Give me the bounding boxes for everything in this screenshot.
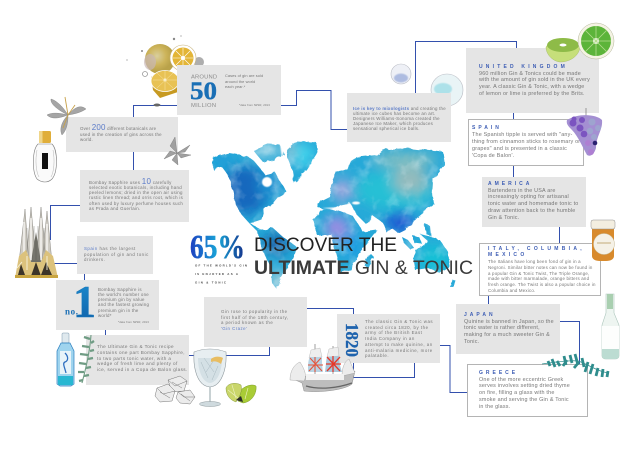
text: number one: Bombay Sapphire is — [98, 286, 142, 292]
panel: 10 botanicals: Bombay Sapphire uses 10 carefully — [89, 177, 172, 186]
body: tonic water and homemade tonic to — [488, 201, 579, 207]
body: grapes" and is presented in a classic — [472, 146, 567, 152]
icon: small flower — [164, 137, 191, 165]
panel: 10 botanicals: rustic linen thread; and orris root, which is — [89, 195, 183, 200]
panel: ice — [347, 93, 451, 142]
icon: perfume bottle — [33, 131, 56, 182]
heading: UNITED KINGDOM — [479, 64, 568, 70]
body: The Spanish tipple is served with "any- — [472, 132, 573, 138]
heading: GREECE — [479, 370, 518, 376]
panel: ice: Designers Williams-Sonoma created the — [353, 116, 440, 121]
body: year. A classic Gin & Tonic, with a wedge — [479, 84, 584, 90]
stat: 65 percent: IS ENJOYED AS A — [195, 272, 239, 276]
panel: 1820: The classic Gin & Tonic was — [365, 319, 433, 324]
title: DISCOVER THE — [254, 234, 397, 256]
map seas — [262, 144, 360, 212]
text: number one: premium gin in the — [98, 308, 139, 313]
icon: gin bottle — [57, 333, 74, 386]
panel: 1820: anti-malaria medicine, more — [365, 348, 433, 353]
body: The Italians have long been fond of gin in a — [488, 259, 581, 264]
icon: cathedral — [15, 207, 58, 278]
panel: America — [482, 177, 586, 227]
icon: iris flower — [47, 97, 86, 135]
panel: United Kingdom — [466, 48, 599, 113]
panel: 10 botanicals — [80, 170, 189, 222]
panel: 10 botanicals: as Prada and Guerlain. — [89, 206, 141, 211]
panel: gin craze: 'Gin Craze' — [221, 326, 247, 331]
panel: ice: sensational spherical ice balls. — [353, 126, 420, 131]
panel: 1820: palatable. — [365, 353, 389, 358]
body — [472, 132, 580, 159]
body: increasingly opting for artisanal — [488, 194, 569, 200]
icon: citrus fruits — [126, 35, 204, 106]
panel: ultimate recipe: to two parts tonic water, with a — [97, 356, 171, 361]
stat: around 50 million: 50 — [190, 78, 217, 105]
panel: ice: Ice is key to mixologists and creating the — [353, 106, 446, 110]
body: with the amount of gin sold in the UK every — [479, 77, 590, 83]
body: Tonic. — [464, 339, 479, 345]
title — [254, 234, 473, 279]
stat: 65 percent — [190, 229, 247, 284]
body: fresh orange. The Twist is also a popular choice in — [488, 282, 596, 287]
stat: around 50 million: AROUND — [191, 74, 217, 80]
body: thing from cinnamon sticks to rosemary or — [472, 139, 580, 145]
heading: AMERICA — [488, 180, 532, 186]
icon: ship — [290, 344, 355, 392]
panel: ultimate recipe: The Ultimate Gin & Tonic recipe — [97, 344, 174, 349]
heading: MEXICO — [488, 252, 528, 258]
text: number one: the world's number one — [98, 292, 149, 297]
panel: Spain population: drinkers. — [84, 257, 105, 262]
body — [479, 376, 570, 410]
panel: around 50 million — [177, 65, 281, 115]
body: made with bitter marmalade, orange bitters and — [488, 276, 589, 281]
body: a popular Gin & Tonic Twist, The Triple Orange, — [488, 270, 589, 276]
panel: 200 botanicals: world. — [80, 137, 93, 142]
icon: grapes — [567, 108, 602, 156]
icon: bubbles — [391, 64, 463, 106]
body: smoke and serving the Gin & Tonic — [479, 397, 569, 403]
body — [488, 188, 579, 221]
panel: 200 botanicals: used in the creation of gins across the — [80, 132, 162, 137]
panel: 1820: created circa 1820, by the — [365, 325, 429, 330]
text: cases of gin: each year.* — [225, 84, 245, 89]
source note: *data from IWSR, 2013 — [239, 103, 270, 107]
panel: ice: ultimate ice cubes has become an art. — [353, 111, 435, 116]
source note: *data from IWSR, 2013 — [118, 320, 149, 324]
panel: 200 botanicals: Over 200 different botanicals are — [80, 123, 156, 132]
text: number one: and the fastest growing — [98, 302, 149, 307]
body: Quinine is banned in Japan, so the — [464, 318, 554, 324]
panel: gin craze: Gin rose to popularity in the — [221, 309, 287, 314]
panel: Spain population: population of gin and tonic — [84, 252, 149, 257]
body — [488, 259, 596, 293]
panel: ice: Japanese Ice Maker, which produces — [353, 121, 433, 126]
body: 'Copa de Balon'. — [472, 153, 514, 159]
panel: 10 botanicals: often used by luxury perfume houses such — [89, 201, 183, 206]
panel: 1820: attempt to make quinine, an — [365, 342, 433, 347]
icon: thyme sprig — [542, 354, 609, 377]
stat: around 50 million: MILLION — [191, 103, 216, 109]
text: cases of gin: Cases of gin are sold — [225, 73, 263, 78]
panel: Italy Columbia Mexico — [479, 243, 601, 296]
stat: number one: no. — [65, 306, 78, 316]
panel: Greece — [467, 364, 588, 417]
heading: JAPAN — [464, 312, 496, 318]
heading — [488, 246, 585, 258]
stat: number one: 1 — [73, 277, 96, 327]
icon: ice cubes — [155, 376, 195, 404]
body — [464, 318, 554, 345]
panel: number one — [56, 280, 159, 330]
icon: half lime and slice — [546, 23, 614, 62]
panel: 10 botanicals: selected exotic botanicals, including hand — [89, 185, 182, 190]
panel: ultimate recipe — [86, 335, 189, 385]
panel: 1820: India Company in an — [365, 336, 415, 341]
stat: 65 percent: 65% — [190, 229, 245, 266]
panel: Spain population — [77, 236, 153, 274]
panel: 200 botanicals — [66, 117, 178, 152]
heading: SPAIN — [472, 125, 502, 131]
text: number one: world* — [98, 313, 112, 318]
body: Negroni. Similar bitter notes can now be found in — [488, 265, 592, 270]
panel: ultimate recipe: ice, served in a Copa de Balon glass. — [97, 367, 188, 372]
panel: gin craze — [204, 297, 307, 347]
title: ULTIMATE GIN & TONIC — [254, 257, 473, 279]
icon: marmalade jar — [591, 220, 615, 261]
body: Gin & Tonic. — [488, 215, 519, 221]
body: 960 million Gin & Tonics could be made — [479, 70, 581, 76]
panel: ultimate recipe: wedge of fresh lime and plenty of — [97, 361, 178, 366]
body: tonic water is rather different, — [464, 325, 540, 331]
text: number one — [98, 286, 149, 318]
world map — [212, 141, 456, 288]
body: draw attention back to the humble — [488, 208, 576, 214]
text: number one: premium gin by value — [98, 297, 145, 302]
panel: Spain population: Spain has the largest — [84, 246, 136, 251]
body — [479, 70, 590, 97]
panel: Japan — [456, 304, 560, 354]
panel: gin craze: first half of the 18th century, — [221, 315, 288, 320]
body: making for a much sweeter Gin & — [464, 332, 550, 338]
connector lines — [50, 42, 580, 392]
stat: 65 percent: OF THE WORLD'S GIN — [195, 264, 247, 268]
body: One of the more eccentric Greek — [479, 376, 563, 382]
icon: gin glass — [194, 349, 226, 406]
icon: lime wedges — [226, 383, 256, 403]
panel: gin craze: a period known as the — [221, 320, 273, 325]
panel: Spain — [468, 119, 584, 166]
text: cases of gin: around the world — [225, 78, 255, 84]
icon: tonic bottle — [602, 294, 619, 359]
heading: ITALY, COLUMBIA, — [488, 246, 585, 252]
panel: 1820: army of the British East — [365, 330, 422, 335]
panel: 1820 — [337, 314, 440, 363]
panel: 10 botanicals: peeled lemons; dried in the open air using — [89, 190, 183, 195]
body: serves involves setting dried thyme — [479, 383, 570, 389]
icon: herb sprig — [78, 335, 94, 383]
text: cases of gin — [225, 73, 263, 89]
body: on fire, filling a glass with the — [479, 390, 555, 396]
stat: 65 percent: GIN & TONIC — [195, 280, 227, 284]
body: Bartenders in the USA are — [488, 188, 556, 194]
panel: ultimate recipe: contains one part Bombay Sapphire, — [97, 350, 185, 355]
stat: 1820: 1820 — [342, 323, 362, 357]
body: Columbia and Mexico. — [488, 288, 535, 293]
body: in the glass. — [479, 404, 510, 410]
body: of lemon or lime is preferred by the Brits. — [479, 91, 585, 97]
